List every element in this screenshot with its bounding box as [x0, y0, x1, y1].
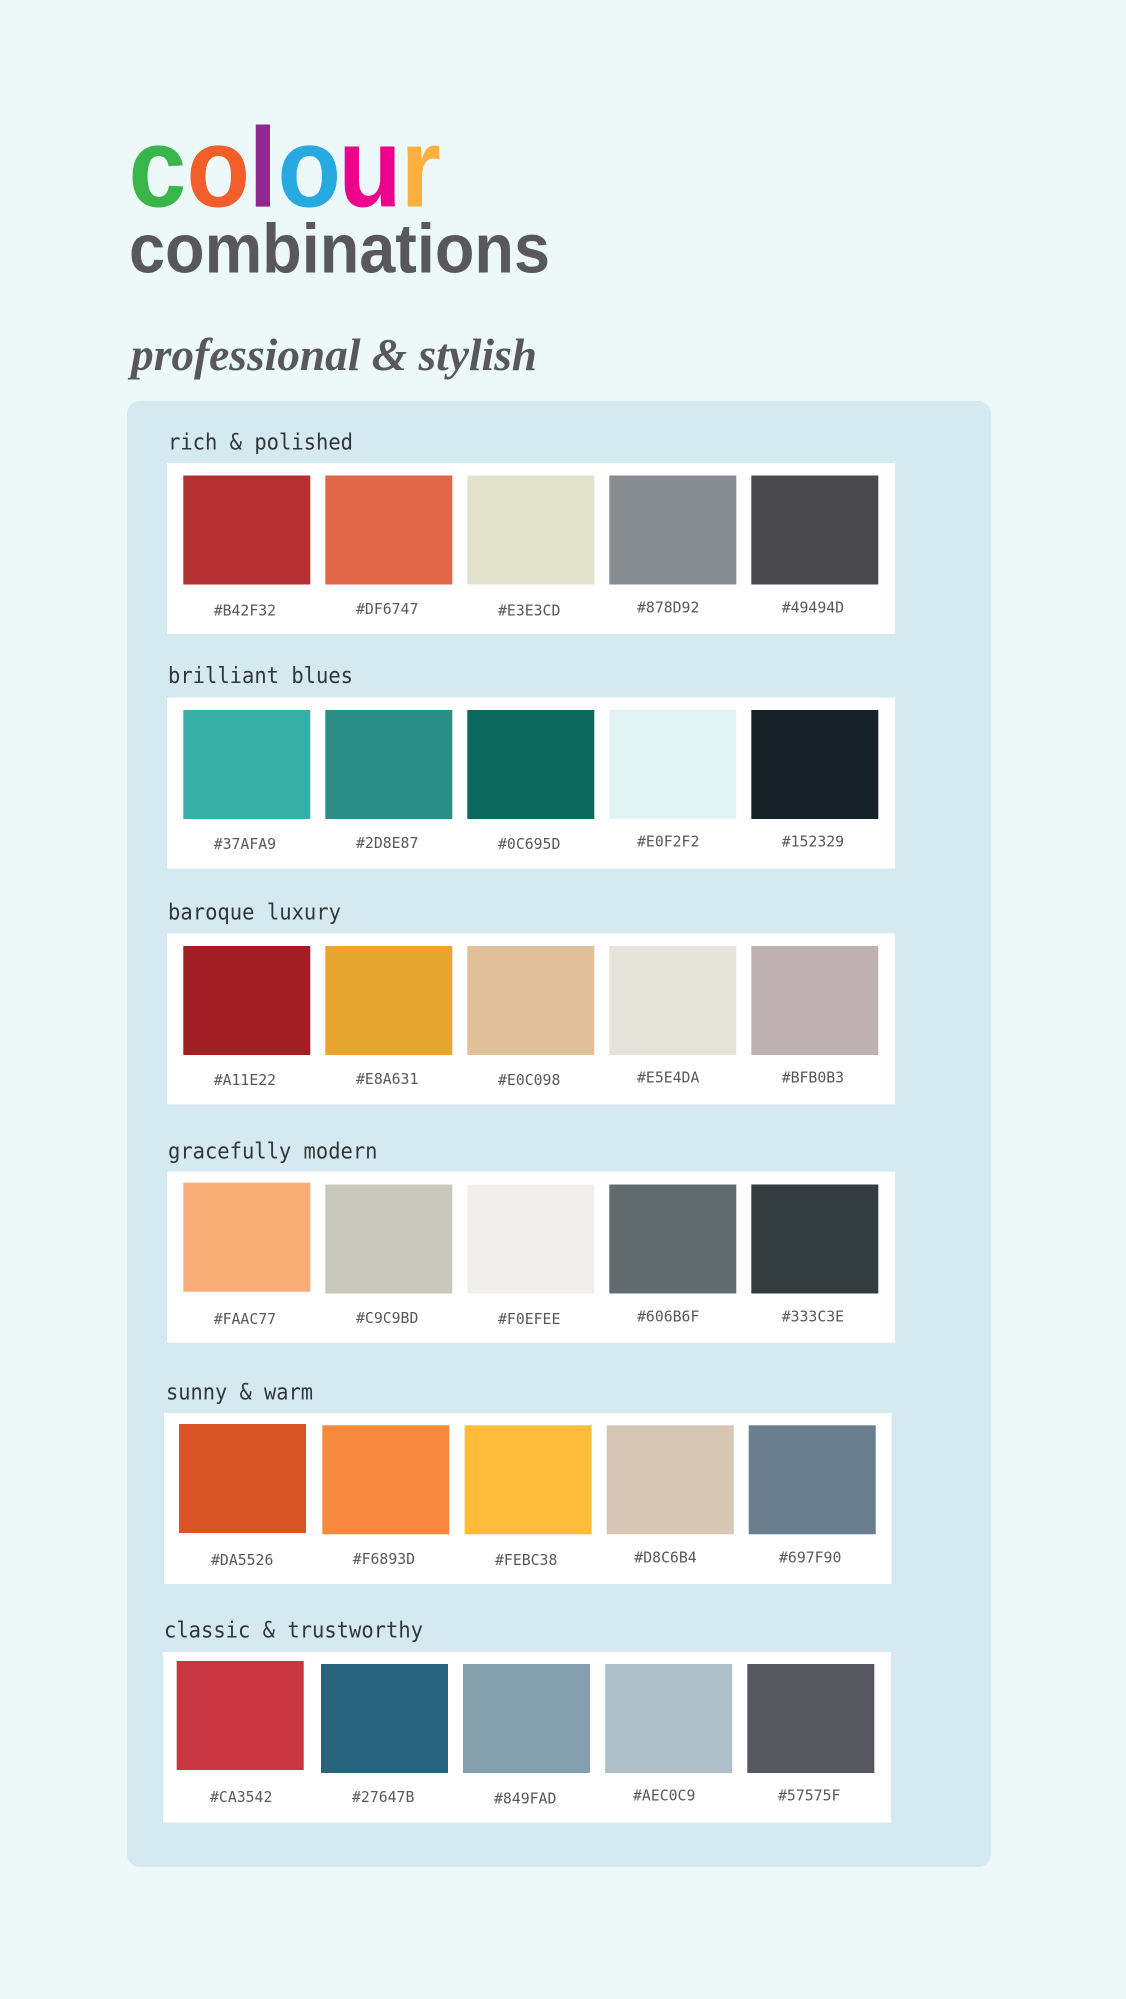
swatch	[607, 1425, 734, 1566]
swatch: #849FAD	[494, 1790, 556, 1808]
swatch: #FEBC38	[495, 1552, 557, 1569]
title: colour: o	[186, 106, 250, 232]
palette card	[167, 933, 895, 1104]
swatch	[751, 476, 878, 616]
swatch	[177, 1661, 304, 1806]
swatch	[325, 476, 452, 618]
palette: sunny & warm	[164, 1380, 892, 1584]
swatch: #E0F2F2	[637, 834, 699, 850]
palette: gracefully modern	[167, 1139, 895, 1343]
title: combinations: combinations	[129, 210, 550, 288]
swatch: #2D8E87	[356, 835, 418, 852]
swatch: #DA5526	[211, 1552, 273, 1569]
swatch	[747, 1664, 874, 1804]
swatch: #D8C6B4	[634, 1550, 697, 1566]
swatch	[609, 946, 736, 1086]
palette title: sunny & warm	[166, 1380, 313, 1405]
swatch	[325, 1184, 452, 1327]
swatch	[609, 476, 736, 616]
title: colour: c	[129, 106, 186, 232]
swatch: #B42F32	[214, 602, 276, 620]
palette card	[167, 698, 895, 868]
palette title: baroque luxury	[168, 900, 341, 925]
swatch: #333C3E	[782, 1308, 844, 1326]
swatch	[183, 946, 310, 1089]
swatch	[609, 1184, 736, 1326]
swatch	[325, 710, 452, 852]
palette: baroque luxury	[167, 900, 895, 1104]
swatch: #878D92	[637, 600, 699, 616]
swatch: #BFB0B3	[782, 1070, 844, 1086]
swatch	[183, 1183, 310, 1328]
palette title: rich & polished	[168, 430, 353, 455]
swatch: #27647B	[352, 1789, 414, 1806]
swatch: #AEC0C9	[633, 1788, 695, 1804]
swatch: #F6893D	[353, 1551, 415, 1568]
palette: rich & polished	[167, 430, 895, 634]
palette title: gracefully modern	[168, 1139, 378, 1164]
swatch: #A11E22	[214, 1072, 276, 1089]
palette title: brilliant blues	[168, 664, 353, 689]
palette card	[167, 463, 895, 634]
title: colour: r	[400, 106, 441, 232]
palette card	[167, 1172, 895, 1343]
swatch	[183, 476, 310, 620]
palette: classic & trustworthy	[163, 1619, 891, 1822]
swatch: #606B6F	[637, 1308, 699, 1326]
panel: palettes	[127, 401, 991, 1867]
palette: brilliant blues	[167, 664, 895, 868]
swatch	[325, 946, 452, 1088]
swatch: #152329	[782, 834, 844, 850]
title: colour: l	[248, 106, 277, 232]
swatch	[463, 1664, 590, 1808]
swatch: #E5E4DA	[637, 1070, 699, 1086]
swatch	[467, 710, 594, 853]
palette card	[163, 1652, 891, 1822]
swatch: #697F90	[779, 1550, 841, 1566]
swatch	[321, 1664, 448, 1806]
swatch	[467, 946, 594, 1089]
swatch: #E8A631	[356, 1071, 418, 1088]
swatch: #0C695D	[498, 836, 560, 853]
title: colour: u	[338, 106, 402, 232]
swatch: #DF6747	[356, 601, 418, 618]
swatch: #FAAC77	[214, 1311, 276, 1328]
swatch	[467, 1184, 594, 1328]
swatch: #E0C098	[498, 1072, 560, 1089]
swatch	[183, 710, 310, 853]
palette card	[164, 1413, 892, 1584]
swatch	[749, 1425, 876, 1566]
swatch	[179, 1424, 306, 1569]
swatch: #F0EFEE	[498, 1311, 560, 1328]
swatch: #C9C9BD	[356, 1310, 418, 1327]
swatch	[467, 476, 594, 620]
swatch: #37AFA9	[214, 836, 276, 853]
swatch	[751, 1184, 878, 1326]
swatch: #49494D	[782, 600, 844, 616]
swatch: #CA3542	[210, 1789, 272, 1806]
swatch	[465, 1425, 592, 1569]
swatch	[322, 1425, 449, 1568]
swatch	[605, 1664, 732, 1804]
swatch	[751, 946, 878, 1086]
swatch	[609, 710, 736, 850]
swatch: #57575F	[778, 1788, 840, 1804]
palette title: classic & trustworthy	[164, 1619, 423, 1644]
title: colour: o	[278, 106, 341, 232]
swatch	[751, 710, 878, 850]
subtitle: professional & stylish	[127, 329, 537, 380]
swatch: #E3E3CD	[498, 602, 560, 620]
